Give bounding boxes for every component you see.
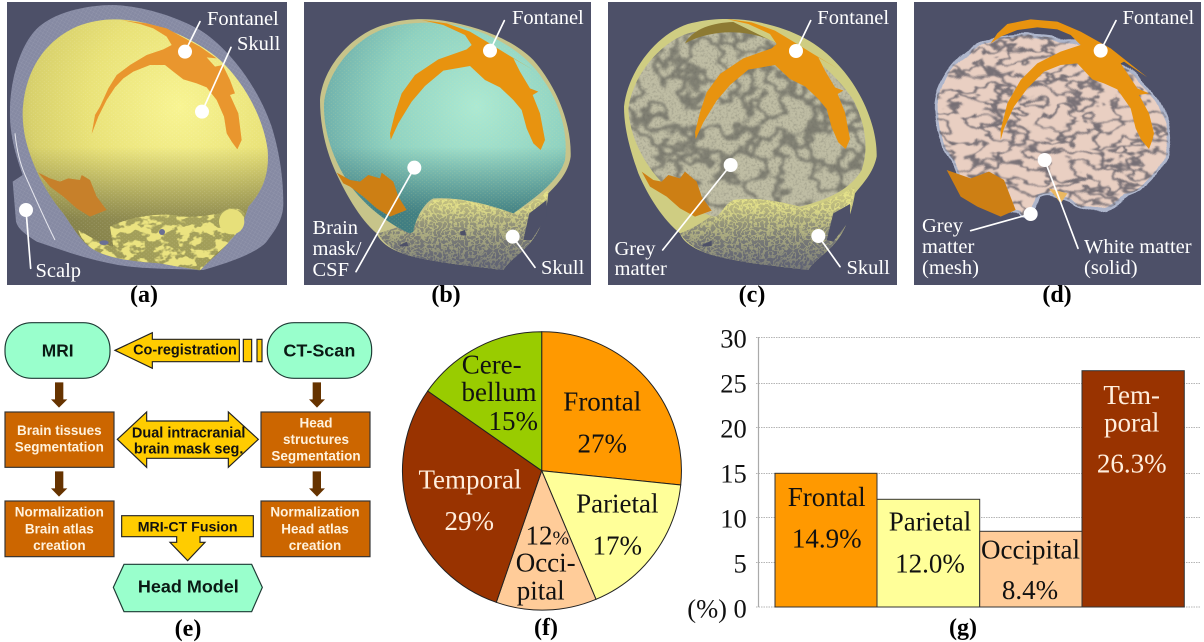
box: brain atlas: creation: [33, 538, 86, 553]
arrow: co-registration: Co-registration: [133, 343, 237, 359]
bar: temporal: Tem-: [1103, 380, 1160, 410]
head model b: [320, 19, 571, 273]
arrow: MRI-CT fusion: [122, 516, 253, 561]
box: head structures segmentation: [261, 412, 370, 467]
arrow: CT to segmentation: [309, 382, 325, 408]
head model a: [10, 5, 283, 273]
y axis: 30: [720, 323, 747, 353]
caption a: (a): [130, 282, 158, 308]
callouts a: Fontanel: [207, 8, 279, 30]
bar: temporal: 26.3%: [1097, 448, 1167, 478]
callouts d: Fontanel: [1122, 7, 1195, 29]
callouts b: CSF: [312, 259, 349, 281]
box: head atlas: Normalization: [270, 505, 360, 520]
bar: frontal: 14.9%: [792, 524, 862, 554]
callouts a: Skull: [237, 33, 281, 55]
arrow: brain segmentation to atlas: [51, 471, 67, 497]
panel f: pie chart: [402, 332, 681, 610]
bar: occipital: [980, 531, 1082, 607]
callouts b: Fontanel: [512, 7, 584, 29]
callouts c: Grey: [614, 238, 656, 260]
box: head atlas: creation: [289, 538, 341, 553]
CT-Scan node: CT-Scan: [283, 341, 355, 361]
caption d: (d): [1042, 282, 1072, 308]
head model node: [113, 564, 262, 612]
panel c: grey matter: [608, 2, 897, 308]
slice: cerebellum: bellum: [462, 377, 536, 407]
bar: parietal: Parietal: [889, 507, 971, 537]
gridlines: [756, 338, 1200, 607]
callouts c: matter: [614, 258, 667, 280]
caption g: (g): [949, 615, 977, 641]
callouts b: mask/: [312, 238, 362, 260]
callouts d: (mesh): [922, 257, 979, 279]
arrow: MRI to segmentation: [51, 382, 67, 408]
bar: temporal: poral: [1104, 408, 1159, 438]
slice: occipital: 12%: [525, 520, 569, 550]
y axis: 15: [720, 459, 747, 489]
arrow: co-registration: [115, 333, 262, 368]
callouts b: Brain: [312, 217, 358, 239]
MRI node: MRI: [42, 341, 74, 361]
bar: temporal: [1082, 371, 1184, 607]
box: brain tissues segmentation: Brain tissues: [17, 423, 102, 438]
arrow: dual intracranial brain mask segmentation: [117, 412, 258, 467]
bar: frontal: [775, 473, 877, 607]
box: brain atlas: Brain atlas: [25, 521, 94, 536]
callouts a: [19, 8, 281, 282]
slice: parietal: 17%: [593, 530, 642, 560]
bar: parietal: [877, 499, 980, 607]
bar: occipital: 8.4%: [1002, 575, 1058, 605]
callouts c: Skull: [846, 257, 890, 279]
callouts d: White matter: [1084, 236, 1192, 258]
panel d: white matter: [914, 2, 1201, 308]
bar: frontal: Frontal: [788, 482, 866, 512]
slice: cerebellum: 15%: [489, 406, 538, 436]
callouts b: Skull: [541, 257, 585, 279]
arrow: MRI-CT fusion: MRI-CT Fusion: [138, 519, 238, 535]
callouts b: [312, 7, 585, 281]
panel b background: [304, 2, 591, 285]
callouts d: [922, 7, 1195, 279]
panel g: bar chart: [687, 323, 1200, 624]
callouts d: (solid): [1084, 257, 1138, 279]
slice: parietal: Parietal: [576, 489, 659, 519]
slice: frontal: Frontal: [563, 387, 641, 417]
bar: occipital: Occipital: [981, 534, 1080, 564]
panel a background: [7, 2, 287, 285]
caption b: (b): [431, 282, 461, 308]
callouts a: Scalp: [36, 260, 81, 282]
slice: temporal: [402, 391, 542, 602]
panel e: flowchart: [5, 323, 372, 612]
box: head atlas: [261, 501, 370, 557]
head model d: [931, 19, 1177, 220]
slice: cerebellum: Cere-: [462, 349, 522, 379]
arrow: dual intracranial brain mask segmentation: brain mask seg.: [134, 441, 243, 457]
head model node: Head Model: [138, 577, 239, 597]
callouts d: matter: [922, 236, 975, 258]
caption c: (c): [739, 282, 765, 308]
slice: temporal: 29%: [445, 506, 494, 536]
callouts c: Fontanel: [817, 7, 889, 29]
box: brain atlas: Normalization: [15, 505, 104, 520]
y axis: (%): [687, 594, 727, 624]
arrow: dual intracranial brain mask segmentation: Dual intracranial: [132, 425, 245, 441]
slice: occipital: [496, 471, 596, 610]
panel b: brain mask: [304, 2, 591, 308]
box: head atlas: Head atlas: [281, 521, 349, 536]
caption f: (f): [534, 615, 558, 641]
caption e: (e): [175, 616, 201, 642]
slice: occipital: pital: [517, 575, 565, 605]
box: head structures segmentation: Segmentation: [271, 449, 361, 464]
head model c: [620, 19, 877, 273]
y axis: 25: [720, 369, 747, 399]
slice: occipital: Occi-: [516, 548, 576, 578]
y axis: 20: [720, 414, 747, 444]
y axis: 5: [733, 549, 747, 579]
slice: parietal: [542, 471, 681, 599]
MRI node: [5, 323, 110, 378]
panel a: scalp and skull: [7, 2, 287, 308]
callouts c: [614, 7, 890, 280]
y axis: 10: [720, 503, 747, 533]
slice: cerebellum: [428, 332, 542, 471]
box: brain tissues segmentation: [5, 412, 114, 467]
callouts d: Grey: [922, 215, 964, 237]
panel c background: [608, 2, 897, 285]
box: brain atlas: [5, 501, 114, 557]
CT-Scan node: [267, 323, 372, 378]
slice: frontal: [542, 332, 681, 485]
slice: frontal: 27%: [578, 429, 627, 459]
box: head structures segmentation: Head: [300, 415, 332, 430]
slice: temporal: Temporal: [418, 464, 522, 494]
bar: parietal: 12.0%: [895, 549, 965, 579]
box: brain tissues segmentation: Segmentation: [15, 440, 104, 455]
panel d background: [914, 2, 1201, 285]
box: head structures segmentation: structures: [283, 432, 349, 447]
y axis: 0: [733, 594, 747, 624]
arrow: head segmentation to atlas: [309, 471, 325, 497]
y axis: [687, 323, 758, 624]
